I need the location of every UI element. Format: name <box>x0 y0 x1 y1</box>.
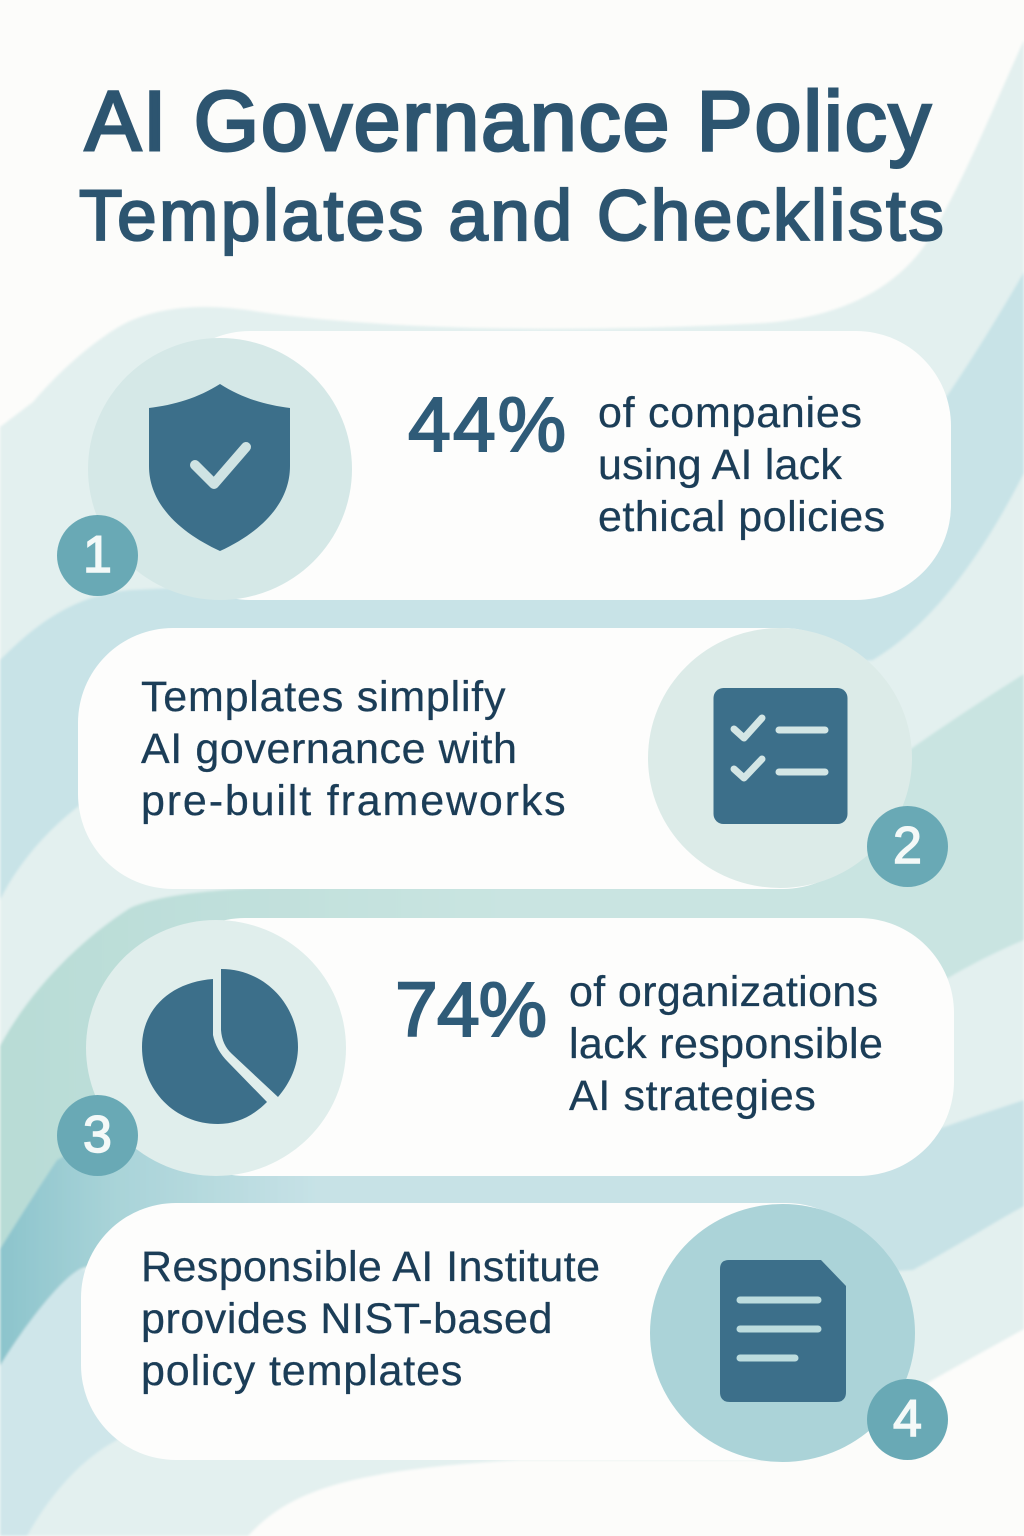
number badge 4 <box>867 1379 948 1460</box>
text: stat 3: of organizations <box>569 968 879 1016</box>
icon circle: shield <box>88 338 352 600</box>
text: stat 3 <box>568 968 883 1120</box>
title: Templates and Checklists <box>79 177 946 256</box>
text: stat 3: lack responsible <box>569 1020 883 1068</box>
text: stat 1: using AI lack <box>598 441 842 489</box>
panel: card 4 <box>81 1203 948 1462</box>
text: stat 1: of companies <box>598 389 863 437</box>
panel: card 2 <box>78 628 948 889</box>
number badge 3: 3 <box>83 1106 112 1164</box>
text: templates: AI governance with <box>141 725 518 773</box>
text: institute: provides NIST-based <box>141 1295 553 1343</box>
text: templates: Templates simplify <box>141 673 506 721</box>
icon: shield check <box>149 384 290 551</box>
statistic 74%: 74% <box>395 967 546 1053</box>
number badge 4: 4 <box>893 1390 922 1448</box>
panel: card 1 <box>57 331 951 600</box>
number badge 2: 2 <box>893 817 922 875</box>
icon circle: checklist <box>648 628 912 888</box>
text: stat 1: ethical policies <box>598 493 886 541</box>
panel: card 3 <box>57 918 954 1176</box>
text: templates: pre-built frameworks <box>141 777 568 825</box>
text: stat 1 <box>598 389 886 541</box>
text: institute: policy templates <box>141 1347 463 1395</box>
icon: checklist <box>714 688 848 824</box>
text: institute <box>141 1243 600 1395</box>
number badge 1: 1 <box>83 526 112 584</box>
number badge 1 <box>57 515 138 596</box>
text: stat 3: AI strategies <box>569 1072 816 1120</box>
icon circle: pie <box>86 920 346 1176</box>
icon circle: document <box>650 1204 915 1462</box>
number badge 2 <box>867 806 948 887</box>
number badge 3 <box>57 1095 138 1176</box>
icon: document <box>720 1260 846 1402</box>
title: AI Governance Policy <box>85 74 933 168</box>
statistic 44%: 44% <box>408 382 568 468</box>
text: institute: Responsible AI Institute <box>141 1243 600 1291</box>
text: templates <box>140 673 568 825</box>
title <box>79 74 946 256</box>
icon: pie chart <box>142 969 298 1124</box>
